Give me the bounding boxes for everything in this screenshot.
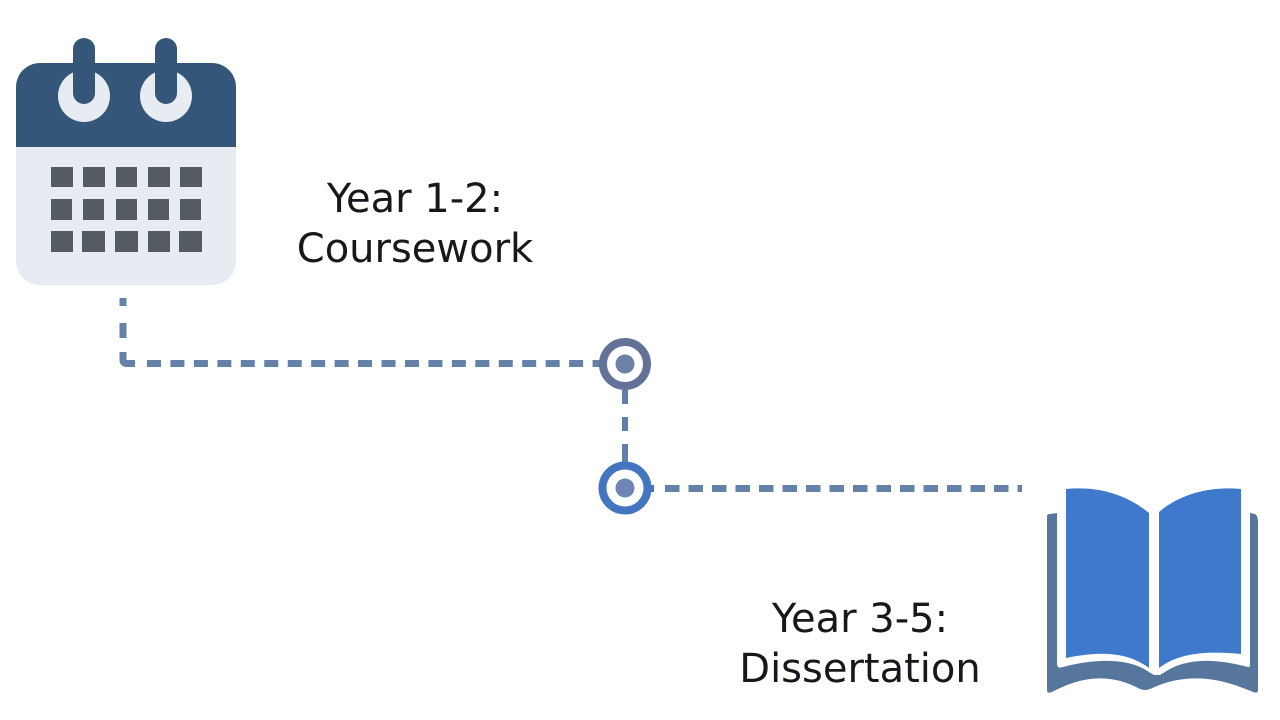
heading: Year 3-5 Dissertation: Year 3-5: [771,596,948,642]
heading: Year 1-2 Coursework: Coursework [297,226,534,272]
heading: Year 1-2 Coursework: Year 1-2: [326,176,503,222]
heading: Year 3-5 Dissertation: Dissertation [739,646,981,692]
node: first milestone [603,342,647,386]
icon: open book [1047,488,1258,693]
icon: calendar [16,38,236,285]
heading: Year 3-5 Dissertation [739,596,981,692]
dashed connector: second node to book [650,485,1022,492]
dashed connector: calendar to first node [123,298,600,364]
heading: Year 1-2 Coursework [297,176,534,272]
node: second milestone [602,466,648,510]
dashed connector: first node to second node [622,390,628,462]
